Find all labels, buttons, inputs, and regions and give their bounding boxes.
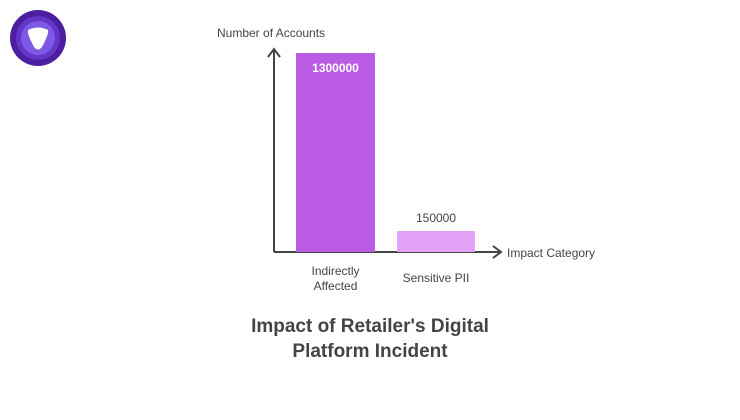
x axis: [274, 246, 501, 258]
category 1: [311, 264, 360, 293]
icon: logo: [10, 10, 66, 66]
chart: [217, 26, 595, 293]
category 1: Affected: [314, 279, 357, 293]
x axis label: Impact Category: [507, 246, 595, 260]
y axis: [268, 49, 280, 252]
title: Platform Incident: [292, 341, 448, 362]
title: [251, 316, 489, 362]
value label 1: 1300000: [312, 61, 359, 75]
category 2: Sensitive PII: [403, 271, 469, 285]
title: Impact of Retailer's Digital: [251, 316, 489, 337]
y axis label: Number of Accounts: [217, 26, 325, 40]
value label 2: 150000: [416, 211, 456, 225]
bar: indirectly affected: [296, 53, 375, 252]
category 1: Indirectly: [311, 264, 360, 278]
bar: sensitive PII: [397, 231, 475, 252]
